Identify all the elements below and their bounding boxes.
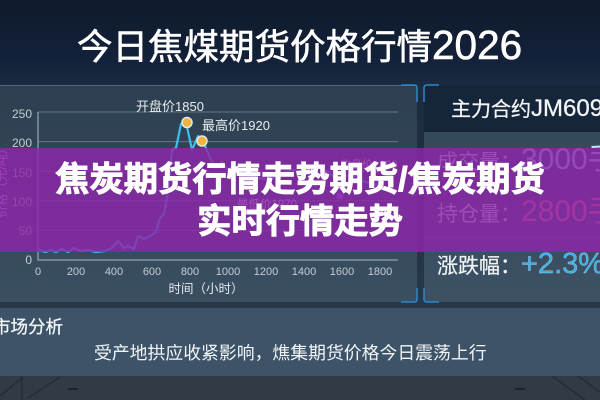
x axis title: 时间（小时） <box>168 282 244 296</box>
marker: close price <box>336 192 344 200</box>
y axis labels: 250 <box>12 107 32 121</box>
stat dividers <box>424 237 600 238</box>
panel: market analysis <box>0 308 600 376</box>
y axis labels <box>12 107 32 267</box>
chart svg <box>0 99 398 296</box>
marker: high price <box>197 136 207 146</box>
label: high price: 最高价1920 <box>202 118 270 133</box>
contract header <box>424 85 600 132</box>
y axis labels: 50 <box>19 224 32 238</box>
y axis labels: 200 <box>12 136 32 150</box>
price line <box>38 122 380 252</box>
banner headline <box>55 161 545 241</box>
x axis labels: 600 <box>143 266 161 278</box>
purple title banner <box>0 148 600 252</box>
x axis labels: 1800 <box>368 266 392 278</box>
x axis labels: 400 <box>105 266 123 278</box>
x axis labels: 1400 <box>292 266 316 278</box>
panel: contract stats <box>424 85 600 302</box>
label: low price: 最低价1970 <box>237 198 297 211</box>
title: 今日焦煤期货价格行情2026 <box>77 22 522 68</box>
x axis labels: 800 <box>181 266 199 278</box>
banner headline: 焦炭期货行情走势期货/焦炭期货 <box>55 161 545 199</box>
x axis labels: 1600 <box>330 266 354 278</box>
x axis labels <box>35 266 392 278</box>
y axis labels: 0 <box>25 253 32 267</box>
analysis body: 受产地拱应收紧影响，燋集期货价格今日震荡上行 <box>94 343 487 363</box>
label: open price: 开盘价1850 <box>136 99 204 114</box>
contract title: 主力合约JM609 <box>451 95 600 122</box>
label: close price: 收盘价1890 <box>340 157 397 171</box>
banner headline: 实时行情走势 <box>197 203 403 241</box>
marker: open price <box>182 118 192 128</box>
x axis labels: 1200 <box>254 266 278 278</box>
x axis labels: 0 <box>35 266 41 278</box>
y axis labels: 150 <box>12 166 32 180</box>
x axis labels: 200 <box>67 266 85 278</box>
stat: change: 涨跌幅：+2.3% <box>437 248 600 280</box>
panel: price chart <box>0 85 417 302</box>
bottom road background <box>0 376 600 400</box>
y axis labels: 100 <box>12 195 32 209</box>
x axis labels: 1000 <box>216 266 240 278</box>
